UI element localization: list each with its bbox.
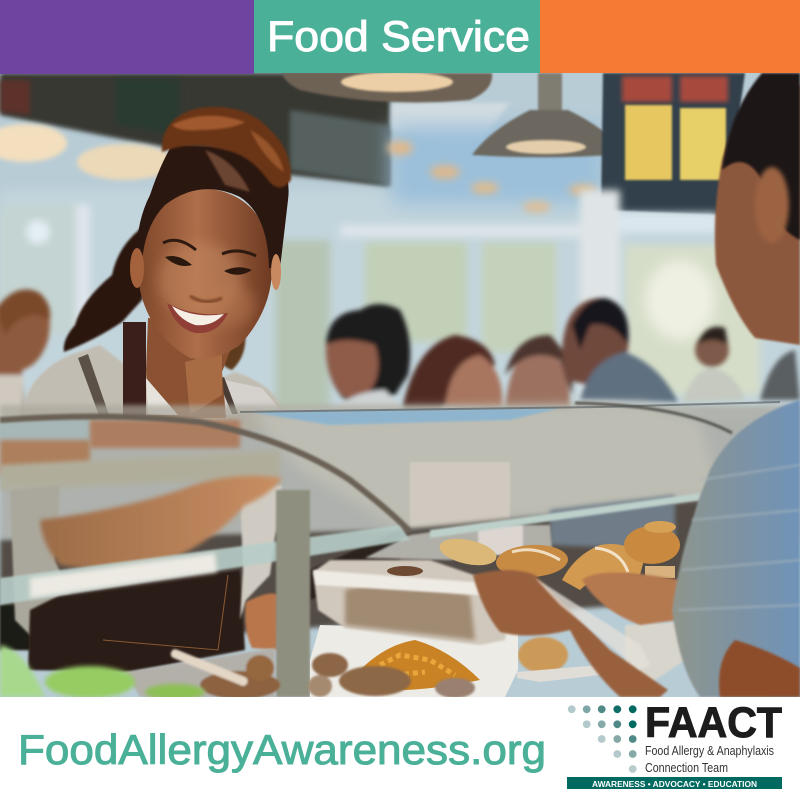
roasted food pieces xyxy=(125,648,475,699)
windows xyxy=(0,190,760,410)
nose xyxy=(190,296,222,302)
hanging lamp one xyxy=(282,72,492,102)
counter rail and post xyxy=(0,402,780,697)
hair and bun xyxy=(136,145,289,268)
ceiling panel xyxy=(388,102,508,131)
customer in foreground xyxy=(672,73,800,697)
back shelf area xyxy=(0,500,700,650)
website address: FoodAllergyAwareness.org xyxy=(18,726,546,773)
neck xyxy=(146,318,230,418)
apron strap xyxy=(123,322,146,418)
food tray and orange food xyxy=(310,625,518,697)
logo dot pattern xyxy=(568,705,637,773)
server arm and apron xyxy=(10,476,282,672)
face xyxy=(136,188,272,359)
header: orange block xyxy=(540,0,800,73)
blurred diners xyxy=(0,289,800,420)
wall menu on the right xyxy=(601,73,745,215)
clear takeaway container xyxy=(313,560,512,645)
cafeteria background xyxy=(0,72,800,697)
customer hands xyxy=(473,570,680,697)
ponytail xyxy=(64,225,150,352)
logo tagline: AWARENESS • ADVOCACY • EDUCATION xyxy=(592,780,757,789)
ear xyxy=(130,248,144,288)
shoulders and top xyxy=(22,345,284,430)
footer band xyxy=(0,697,800,800)
FAACT logo xyxy=(567,699,782,789)
ceiling lights on the left xyxy=(0,124,67,162)
header: purple block xyxy=(0,0,254,74)
logo wordmark: FAACT xyxy=(645,699,782,747)
eyes xyxy=(165,256,192,266)
logo tagline bar xyxy=(567,777,782,789)
bread rolls xyxy=(437,521,685,690)
photo: server and customer at food counter xyxy=(0,72,800,700)
smile xyxy=(167,303,228,333)
title: Food Service xyxy=(267,13,530,61)
server: woman smiling xyxy=(22,107,291,430)
logo full name: Food Allergy & Anaphylaxis xyxy=(645,744,774,758)
logo full name second line: Connection Team xyxy=(645,761,728,775)
header: teal title block xyxy=(254,0,540,73)
hanging lamp two xyxy=(471,73,604,159)
eyebrows xyxy=(163,240,196,250)
food case glass xyxy=(0,404,800,650)
menu boards on the left xyxy=(0,73,390,186)
small blurred pendant lights xyxy=(387,141,597,213)
header band xyxy=(0,0,800,74)
greens xyxy=(0,645,205,700)
